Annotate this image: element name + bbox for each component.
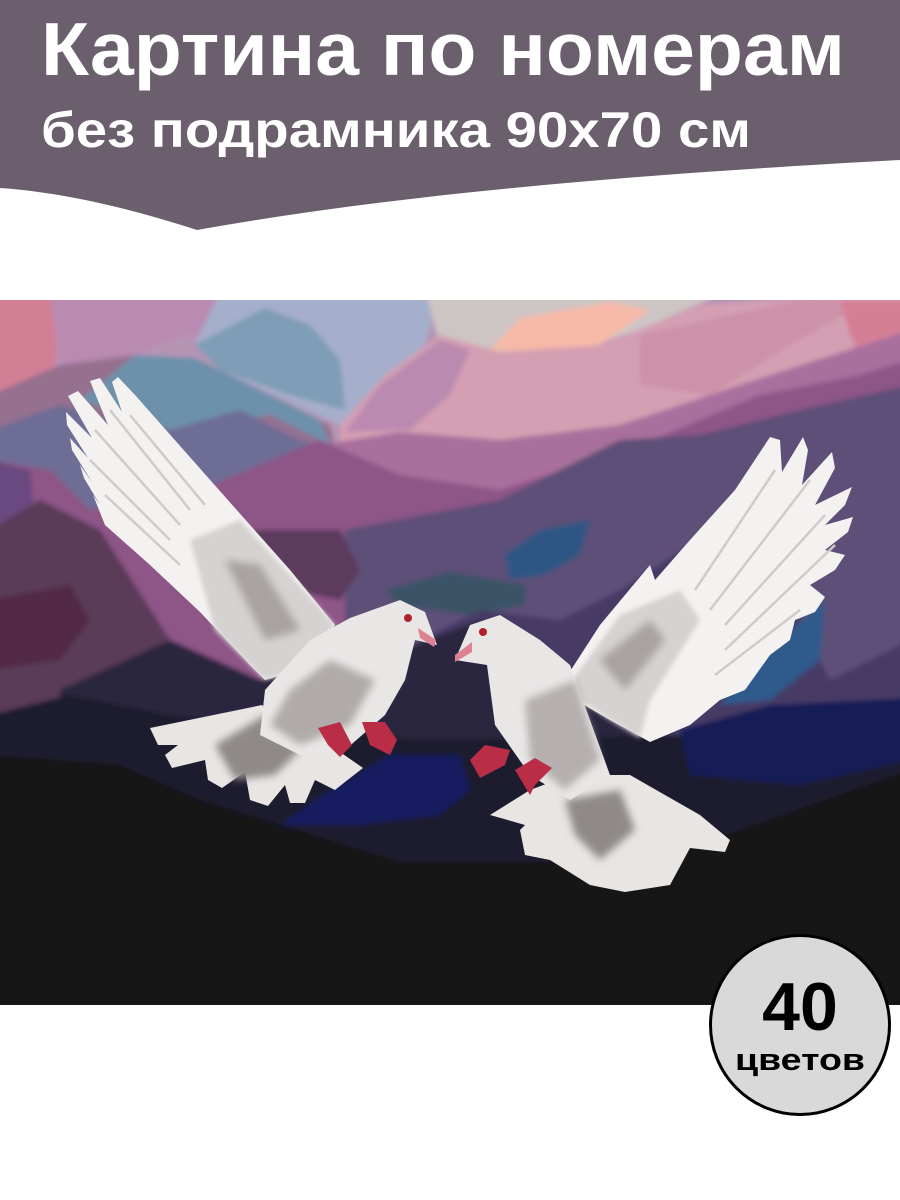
dove: left — [66, 377, 437, 806]
subtitle: без подрамника 90х70 см — [41, 102, 751, 158]
beak and eye — [455, 642, 472, 662]
tail — [150, 705, 363, 806]
body — [260, 600, 437, 755]
body — [455, 615, 610, 800]
right wing — [558, 437, 853, 742]
badge number: 40 — [762, 969, 838, 1045]
beak and eye — [418, 628, 436, 647]
feet — [470, 745, 552, 795]
dove: right — [455, 437, 853, 892]
sky and mountains background — [0, 290, 900, 1015]
header banner — [0, 0, 900, 230]
tail — [490, 775, 730, 892]
feet — [318, 722, 397, 757]
title: Картина по номерам — [41, 7, 845, 91]
badge: 40 colours — [710, 936, 890, 1114]
badge caption: цветов — [735, 1042, 865, 1077]
painting: two white doves at dusk — [0, 290, 900, 1015]
left wing — [66, 377, 335, 680]
